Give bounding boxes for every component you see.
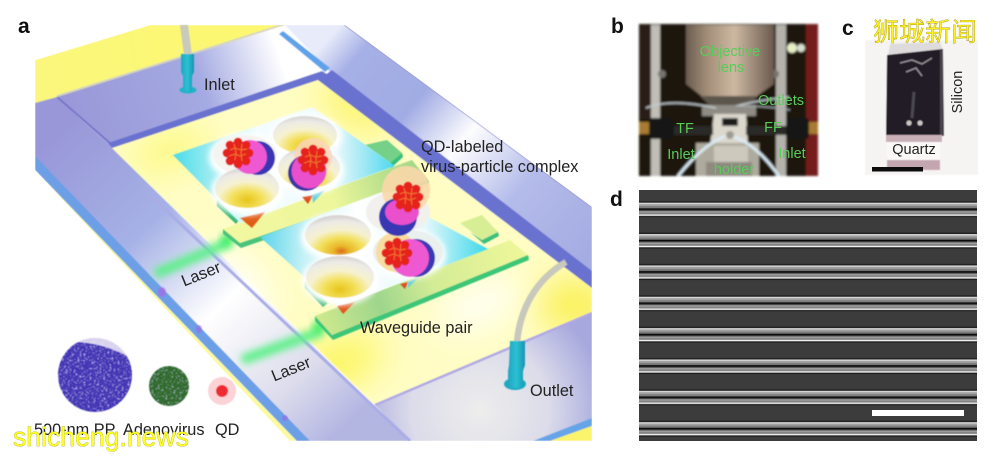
label: virus complex: QD-labeled — [421, 138, 503, 156]
panel c: device photo — [865, 40, 978, 175]
panel a labels — [18, 15, 578, 439]
upper sensor panel with funnels — [173, 107, 395, 228]
label: outlet: Outlet — [530, 382, 574, 400]
photo labels: holder — [714, 162, 754, 178]
legend: quantum dot — [208, 377, 236, 405]
legend label: PP: 500-nm PP — [34, 421, 115, 439]
legend label: adenovirus: Adenovirus — [123, 421, 204, 439]
photo labels: Outlets — [758, 93, 804, 109]
icon: outlet tube and connector — [504, 262, 566, 390]
scale bar — [872, 410, 964, 416]
chip body — [30, 20, 613, 445]
waveguide lines — [639, 190, 977, 441]
photo labels: Inlet — [667, 147, 695, 163]
heading b: b — [611, 15, 624, 38]
waveguide pairs — [217, 140, 529, 340]
label: virus complex: virus-particle complex — [421, 158, 578, 176]
photo labels: Objective — [700, 44, 760, 60]
label: upper laser: Laser — [179, 258, 224, 290]
heading c: c — [842, 17, 854, 40]
lower sensor panel with funnels — [260, 166, 488, 314]
icon: inlet tube and connector — [180, 25, 196, 94]
watermark: Chinese: 狮城新闻 — [873, 17, 977, 47]
photo labels: Inlet — [778, 146, 806, 162]
watermark: Latin: shicheng.news — [13, 422, 189, 452]
photo labels: lens — [718, 60, 744, 76]
photo labels: TF — [676, 121, 694, 137]
photo scene — [639, 24, 818, 176]
heading a: a — [18, 15, 30, 38]
photo of chip — [865, 40, 978, 175]
legend: adenovirus — [149, 366, 189, 406]
green laser beams — [155, 234, 325, 360]
label: quartz: Quartz — [892, 142, 936, 158]
panel a: microfluidic chip — [30, 20, 613, 445]
label: silicon: Silicon — [950, 71, 966, 113]
label: waveguide pair: Waveguide pair — [360, 319, 473, 337]
panel b: instrument photo — [639, 24, 818, 178]
legend label: QD: QD — [215, 421, 239, 439]
scale bar — [872, 167, 923, 172]
heading d: d — [610, 188, 623, 211]
label: lower laser: Laser — [269, 353, 314, 385]
panel d: electron micrograph — [639, 190, 977, 441]
photo labels: FF — [764, 120, 782, 136]
legend: 500-nm PP particle — [58, 338, 132, 412]
label: inlet: Inlet — [204, 76, 235, 94]
photo labels — [667, 44, 806, 178]
